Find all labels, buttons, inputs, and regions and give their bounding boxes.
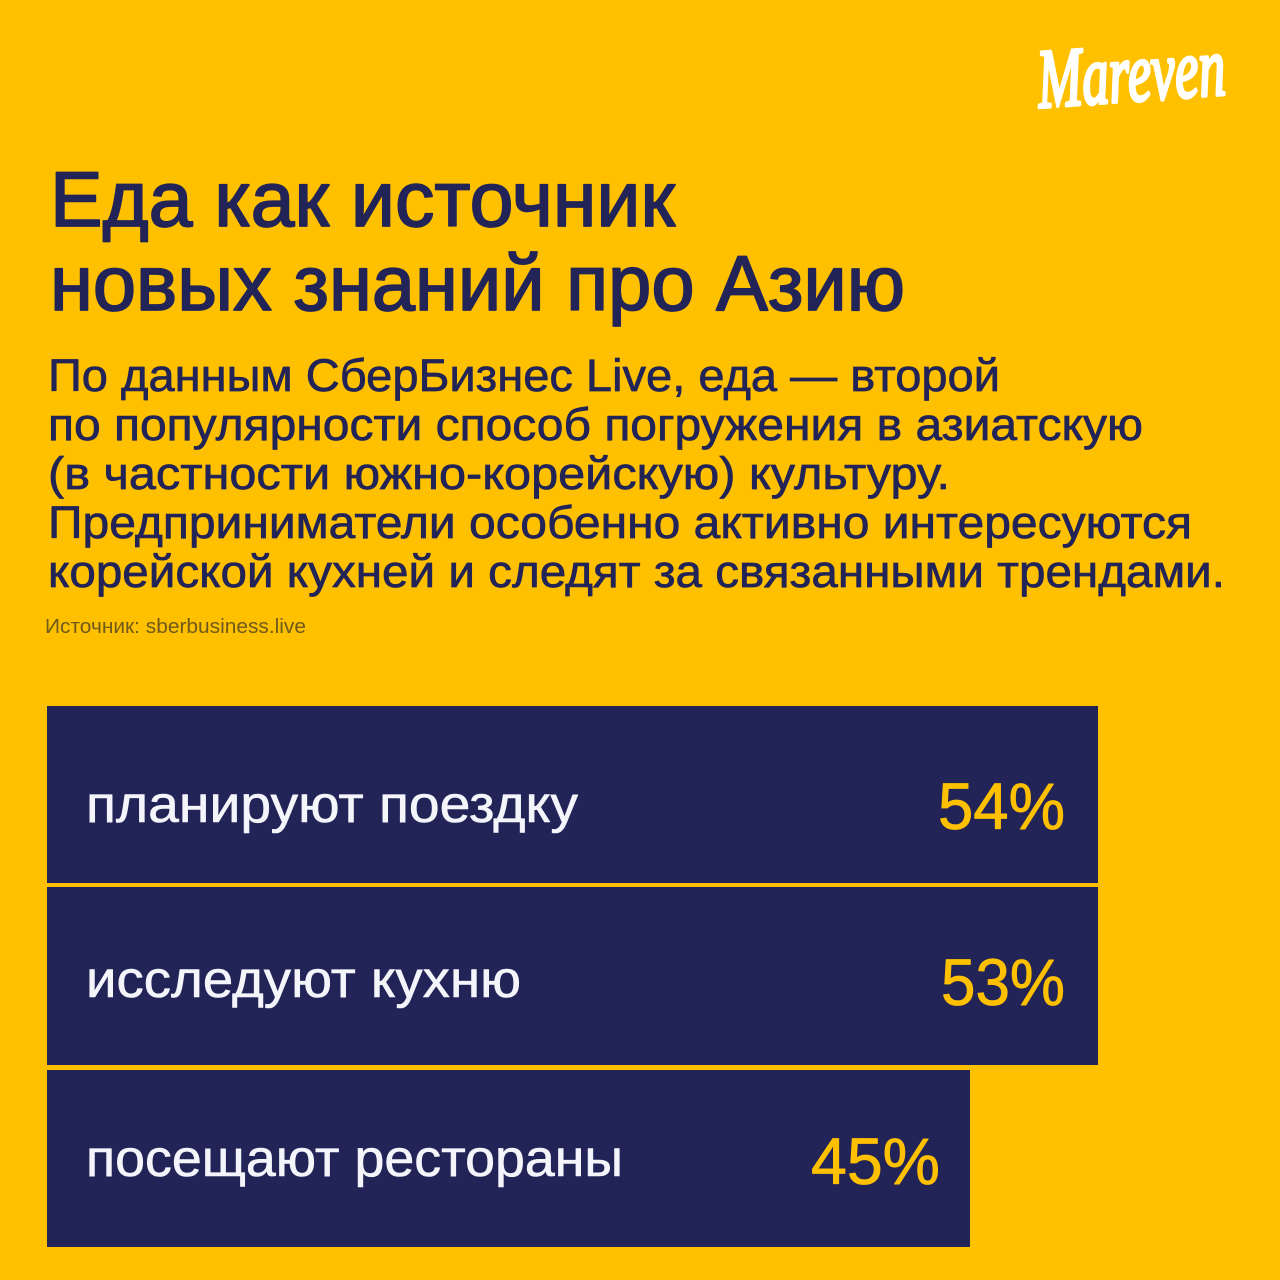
source note: Источник: sberbusiness.live [45, 616, 306, 638]
bar label: исследуют кухню: исследуют кухню [86, 951, 521, 1009]
body text block: По данным СберБизнес Live, еда — второй [48, 350, 1000, 401]
bar: исследуют кухню 53% [47, 887, 1098, 1065]
bar value: 53%: 53% [941, 945, 1065, 1019]
body text block [48, 350, 1225, 597]
title [50, 155, 905, 327]
body text block: по популярности способ погружения в азиатскую [48, 399, 1143, 450]
title: новых знаний про Азию [50, 239, 905, 327]
title: Еда как источник [50, 155, 676, 243]
body text block: Предприниматели особенно активно интересуются [48, 497, 1192, 548]
body text block: (в частности южно-корейскую) культуру. [48, 448, 950, 499]
bar: посещают рестораны 45% [47, 1070, 970, 1247]
bar: планируют поездку 54% [47, 706, 1098, 883]
body text block: корейской кухней и следят за связанными трендами. [48, 546, 1225, 597]
bar label: планируют поездку: планируют поездку [86, 776, 578, 834]
bar value: 45%: 45% [811, 1124, 940, 1198]
bar value: 54%: 54% [938, 769, 1065, 843]
bar label: посещают рестораны: посещают рестораны [86, 1130, 623, 1188]
